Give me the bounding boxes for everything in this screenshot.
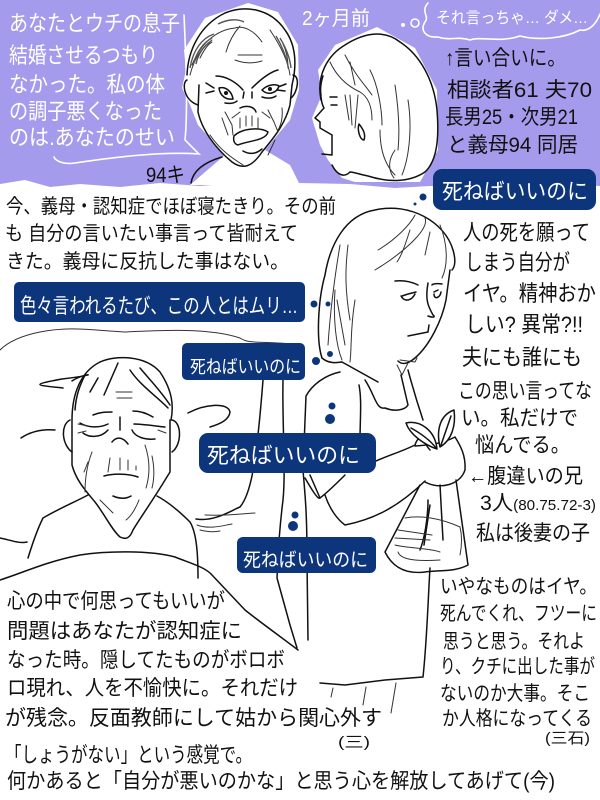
text block: advice from Mi: ロ現れ、人を不愉快に。それだけ <box>7 677 298 700</box>
text block: family profile: 相談者61 夫70 <box>447 79 592 102</box>
text block: family profile: 長男25・次男21 <box>445 106 578 129</box>
text block: consultation intro: も 自分の言いたい事言って皆耐えて <box>5 222 298 245</box>
caption: every time she says things: 色々言われるたび、この人とはムリ… <box>20 295 298 318</box>
text block: advice from Mitsuishi: (三石) <box>545 730 590 747</box>
text block: half brothers: ←腹違いの兄 <box>468 465 583 488</box>
text block: guilt and worry: しい? 異常?!! <box>465 312 583 337</box>
text block: advice from Mi: (三) <box>338 734 370 751</box>
illustration: bedridden mother-in-law <box>0 329 300 650</box>
text block: half brothers: 3人(80.75.72-3) <box>480 492 596 515</box>
caption: every time she says things <box>14 282 305 322</box>
speech bubble: wife's accusation: のは.あなたのせい <box>9 125 175 150</box>
text block: consultation intro <box>5 195 336 273</box>
panel: purple header background <box>0 0 600 188</box>
text block: advice from Mi: 心の中で何思ってもいいが <box>7 590 225 613</box>
text block: advice from Mitsuishi <box>440 576 597 747</box>
text block: half brothers <box>468 465 596 545</box>
text block: advice from Ima <box>5 744 555 793</box>
annotation: argument arrow: ↑言い合いに。 <box>445 47 566 70</box>
caption: wish they would die, top: 死ねばいいのに <box>442 179 588 204</box>
caption: wish they would die, small <box>182 343 305 380</box>
text block: advice from Mi <box>5 590 382 751</box>
caption: wish they would die, middle: 死ねばいいのに <box>207 443 360 468</box>
caption: wish they would die, top <box>433 169 596 210</box>
speech bubble: wife's accusation: なかった。私の体 <box>9 72 165 97</box>
speech bubble: wife's accusation <box>9 11 199 163</box>
caption: wish they would die, lower: 死ねばいいのに <box>243 549 368 571</box>
text block: guilt and worry: 悩んでる。 <box>475 434 570 457</box>
text block: advice from Ima: 何かあると「自分が悪いのかな」と思う心を解放してあげて(今) <box>7 770 555 793</box>
caption: wish they would die, lower <box>237 537 376 573</box>
text block: guilt and worry: い。私だけで <box>461 407 578 430</box>
text block: advice from Mi: なった時。隠してたものがボロボ <box>7 649 285 672</box>
thought bubble: shouldn't say that <box>423 3 600 40</box>
annotation: husband age 94キ: 94キ <box>146 164 185 187</box>
text block: consultation intro: きた。義母に反抗した事はない。 <box>6 250 289 273</box>
speech bubble: wife's accusation: の調子悪くなった <box>9 99 162 124</box>
text block: advice from Mi: 問題はあなたが認知症に <box>7 620 242 643</box>
text block: advice from Ima: 「しょうがない」という感覚で。 <box>5 744 252 767</box>
icon: thought dots <box>401 19 419 27</box>
speech bubble: wife's accusation: あなたとウチの息子 <box>9 11 180 36</box>
illustration: wife in profile <box>312 27 438 182</box>
annotation: two months ago: 2ヶ月前 <box>302 7 370 30</box>
illustration: angry old husband <box>182 3 300 185</box>
icon: blue ink droplets <box>288 194 426 531</box>
caption: wish they would die, small: 死ねばいいのに <box>190 357 301 377</box>
illustration: main woman standing with shopping bag <box>303 206 470 713</box>
thought bubble: shouldn't say that: それ言っちゃ… ダメ… <box>436 9 588 27</box>
caption: wish they would die, middle <box>199 433 376 473</box>
text block: half brothers: 私は後妻の子 <box>476 522 590 545</box>
text block: guilt and worry: 夫にも誰にも <box>462 345 582 370</box>
text block: family profile: と義母94 同居 <box>447 134 578 157</box>
speech bubble: wife's accusation: 結婚させるつもり <box>9 43 158 68</box>
text block: family profile <box>445 79 592 157</box>
text block: advice from Mi: が残念。反面教師にして姑から関心外す <box>5 707 382 730</box>
text block: guilt and worry: しまう自分が <box>465 250 570 275</box>
text block: guilt and worry <box>458 220 596 457</box>
text block: consultation intro: 今、義母・認知症でほぼ寝たきり。その前 <box>6 195 336 218</box>
